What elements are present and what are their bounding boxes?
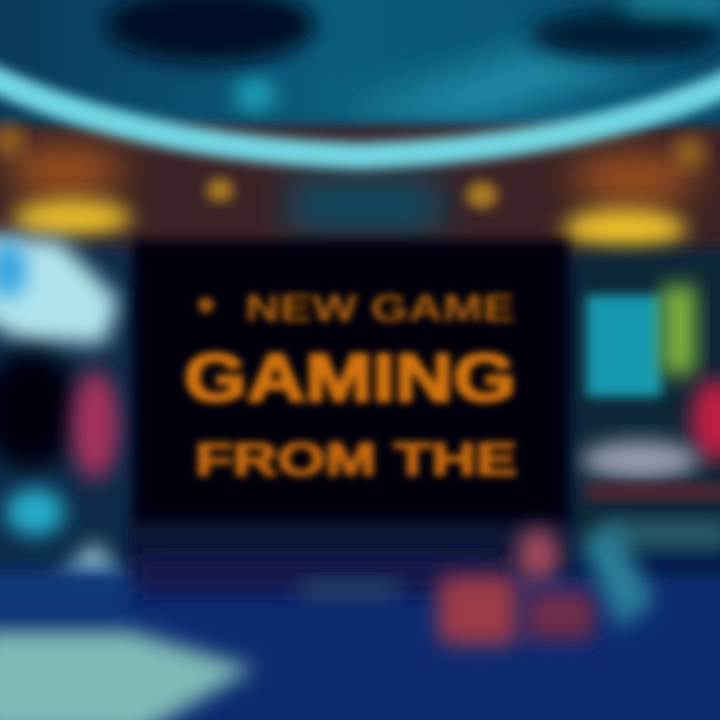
wall band [0,125,720,255]
laptop screen [133,240,569,522]
laptop base [130,515,570,600]
line 1: NEW GAME [245,288,515,330]
stacked casino chips [438,525,655,645]
cyan neon arc [0,72,720,156]
left side panel [0,235,135,590]
right side panel [570,250,720,550]
paper on table [0,630,255,720]
line 3: FROM THE [195,433,517,485]
bullet [198,297,214,313]
ceiling background [0,0,720,170]
table surface [0,570,720,720]
ceiling dark fixtures [105,0,720,63]
amber lights [0,126,704,252]
screen headline text [184,288,517,485]
line 2: GAMING [184,340,516,416]
